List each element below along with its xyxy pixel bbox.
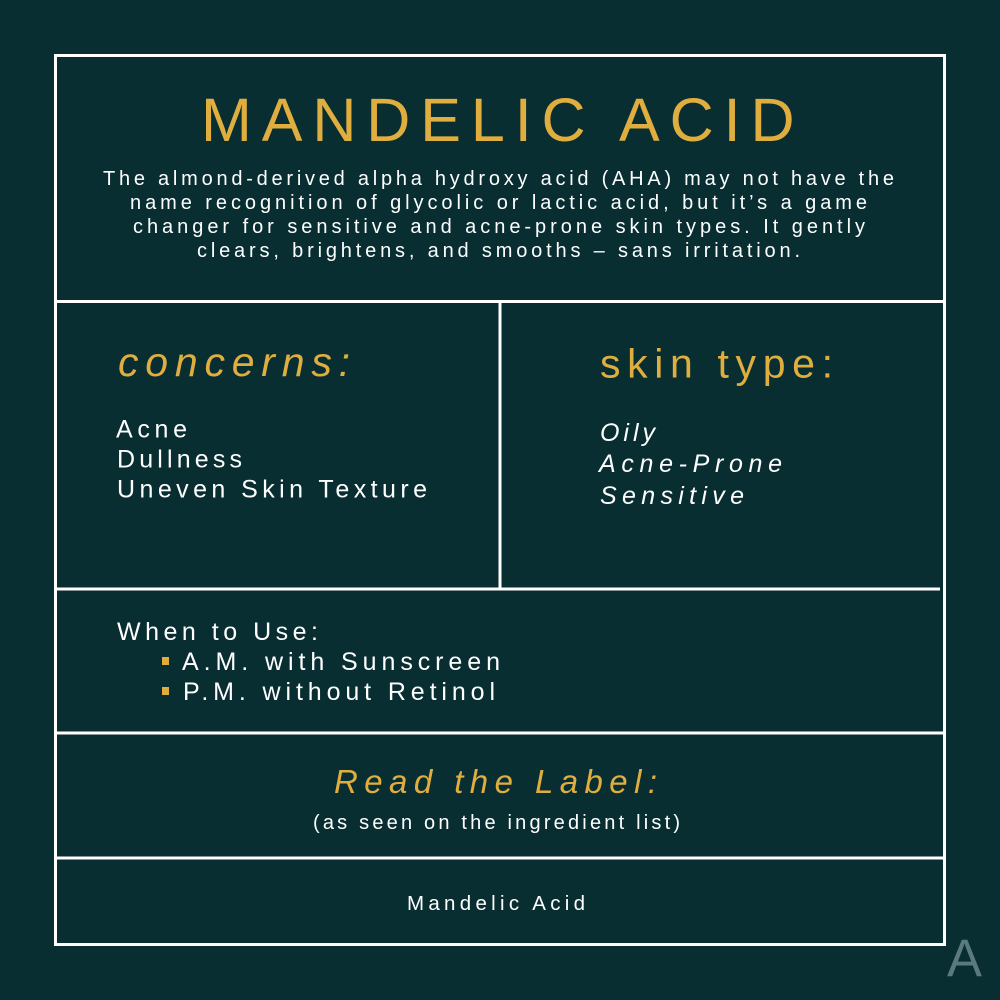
watermark logo letter: A (947, 929, 983, 988)
when to use heading: When to Use: (117, 618, 318, 646)
panel: ingredient name: Mandelic Acid (407, 892, 585, 915)
panel: concerns (116, 339, 427, 504)
intro text block: clears, brightens, and smooths – sans irritation. (197, 240, 800, 262)
skin type list: Acne-Prone (597, 450, 782, 478)
title: MANDELIC ACID (201, 86, 794, 154)
intro text block: The almond-derived alpha hydroxy acid (AHA) may not have the (103, 168, 894, 190)
read the label heading: Read the Label: (334, 763, 657, 800)
skin type list: Oily (600, 419, 656, 447)
skin type heading: skin type: (600, 340, 833, 386)
skin type list (597, 419, 782, 510)
panel: header (103, 86, 894, 262)
bullet: A.M.: A.M. with Sunscreen (182, 648, 500, 676)
read the label subtext: (as seen on the ingredient list) (313, 812, 680, 834)
concerns list: Dullness (117, 446, 242, 474)
intro text block: name recognition of glycolic or lactic acid, but it’s a game (130, 192, 867, 214)
intro text block (103, 168, 894, 262)
panel: skin type (597, 340, 833, 510)
concerns list: Uneven Skin Texture (117, 476, 427, 504)
skin type list: Sensitive (600, 482, 744, 510)
concerns list (116, 416, 427, 504)
concerns list: Acne (116, 416, 187, 444)
intro text block: changer for sensitive and acne-prone skin types. It gently (133, 216, 865, 238)
outer frame and grid lines (56, 56, 944, 944)
panel: when to use (117, 618, 500, 706)
panel: read the label (313, 763, 680, 834)
concerns heading: concerns: (118, 339, 350, 385)
bullet: P.M.: P.M. without Retinol (183, 678, 495, 706)
